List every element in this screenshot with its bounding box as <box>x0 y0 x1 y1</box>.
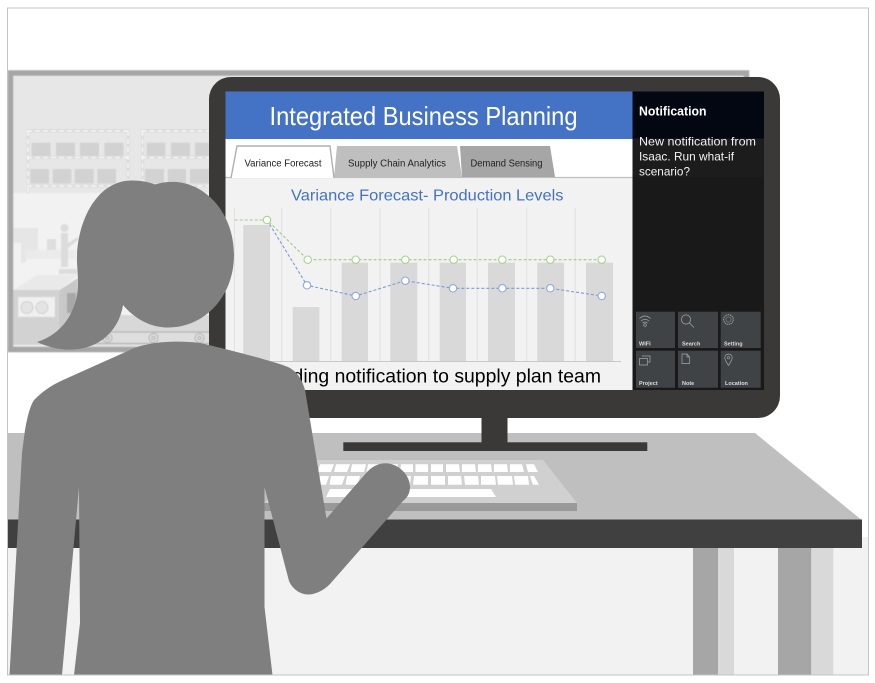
machine with gauges <box>14 275 78 345</box>
notification message: New notification from <box>639 134 756 148</box>
tab: Variance Forecast <box>231 146 334 178</box>
title: Integrated Business Planning <box>270 101 578 131</box>
monitor base <box>343 442 647 451</box>
tile: Search <box>678 312 718 348</box>
conveyor belt <box>60 315 215 346</box>
panel: factory picture on the wall <box>10 73 746 350</box>
chart title: Variance Forecast- Production Levels <box>291 188 564 204</box>
keyboard keys <box>318 464 539 497</box>
monitor <box>209 77 780 451</box>
bars <box>243 225 613 361</box>
monitor stand <box>482 418 508 443</box>
tile: Location: Location <box>725 381 749 387</box>
notification message: Isaac. Run what-if <box>639 150 735 164</box>
body and arms <box>10 342 410 675</box>
desk legs <box>693 548 833 675</box>
panel: notification sidebar <box>632 92 764 390</box>
factory worker <box>59 224 78 274</box>
tile: Setting <box>721 312 761 348</box>
tile: Note <box>678 351 718 388</box>
green plan line <box>235 216 605 263</box>
tab: Demand Sensing <box>460 146 555 177</box>
tile: Search: Search <box>682 342 701 348</box>
notification heading: Notification <box>639 104 706 118</box>
screen: main dashboard <box>226 92 632 390</box>
room floor <box>8 537 868 675</box>
warehouse shelf right <box>141 129 244 193</box>
desk <box>8 433 862 675</box>
header bar <box>226 92 632 139</box>
tile: WIFI: WIFI <box>639 342 651 348</box>
tile: Note: Note <box>682 381 694 387</box>
tile: Project <box>636 351 675 388</box>
warehouse shelf left <box>26 129 130 193</box>
tab: Supply Chain Analytics: Supply Chain Analytics <box>348 158 446 170</box>
tab: Variance Forecast: Variance Forecast <box>244 158 322 170</box>
tile: Project: Project <box>639 381 658 387</box>
tile: Setting: Setting <box>724 342 743 348</box>
tab: Supply Chain Analytics <box>334 146 462 177</box>
workbench <box>14 228 38 263</box>
person seen from behind <box>10 180 410 675</box>
head and ponytail <box>37 180 234 350</box>
tile: WIFI <box>636 312 675 348</box>
bar and line chart <box>234 208 621 362</box>
tile: Location <box>721 351 761 388</box>
caption: Sending notification to supply plan team <box>258 366 601 388</box>
keyboard <box>264 460 577 511</box>
notification message: scenario? <box>639 164 690 178</box>
notification message <box>639 134 756 178</box>
blue forecast line <box>267 220 605 300</box>
tab: Demand Sensing: Demand Sensing <box>470 158 542 170</box>
